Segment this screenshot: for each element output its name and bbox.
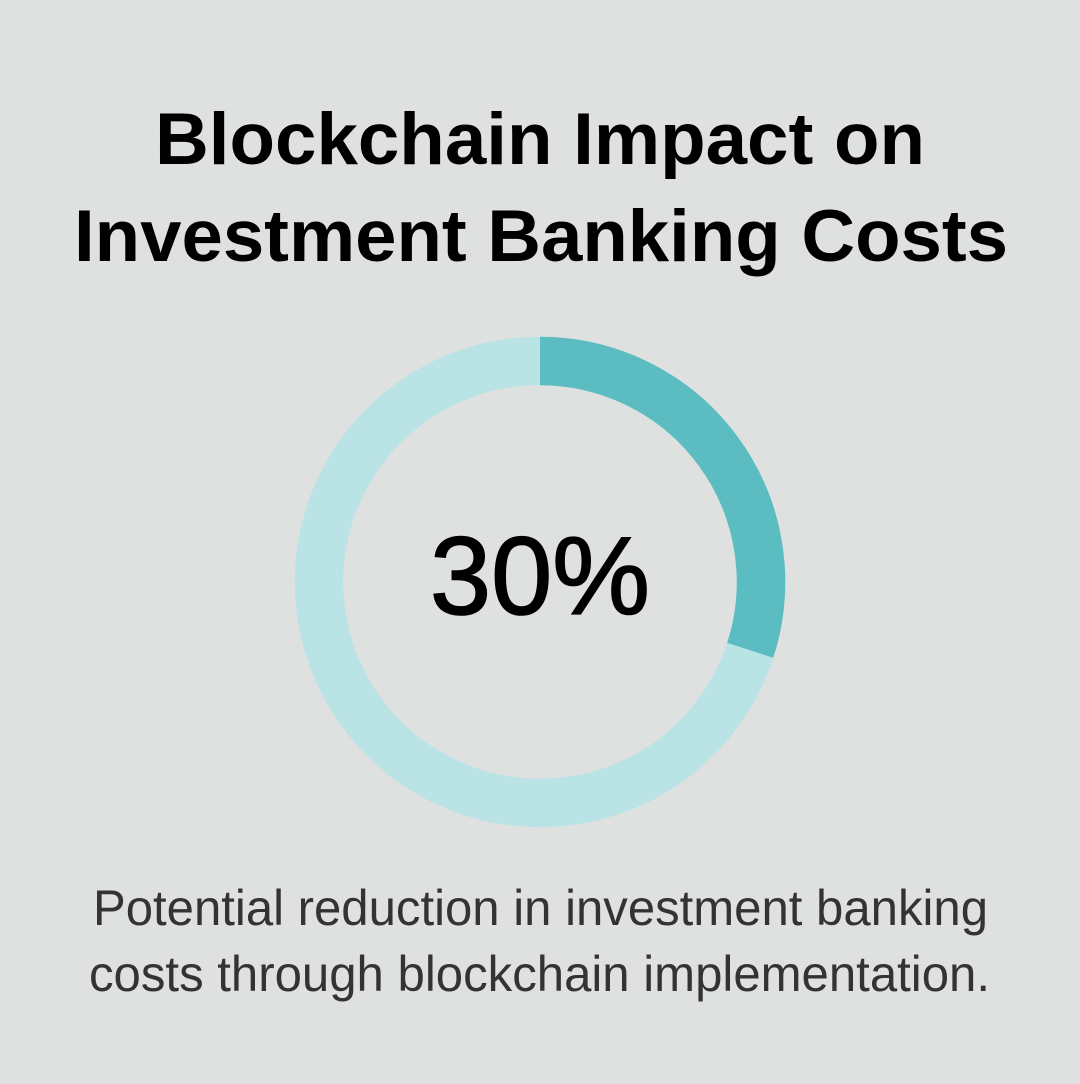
donut chart: 30 percent	[319, 361, 761, 803]
title: Investment Banking Costs	[74, 196, 1008, 277]
description: costs through blockchain implementation.	[89, 946, 990, 1002]
percentage value: 30%	[430, 515, 650, 638]
title: Blockchain Impact on	[155, 99, 925, 180]
description	[89, 880, 990, 1002]
description: Potential reduction in investment banking	[93, 880, 988, 936]
title	[74, 99, 1008, 277]
